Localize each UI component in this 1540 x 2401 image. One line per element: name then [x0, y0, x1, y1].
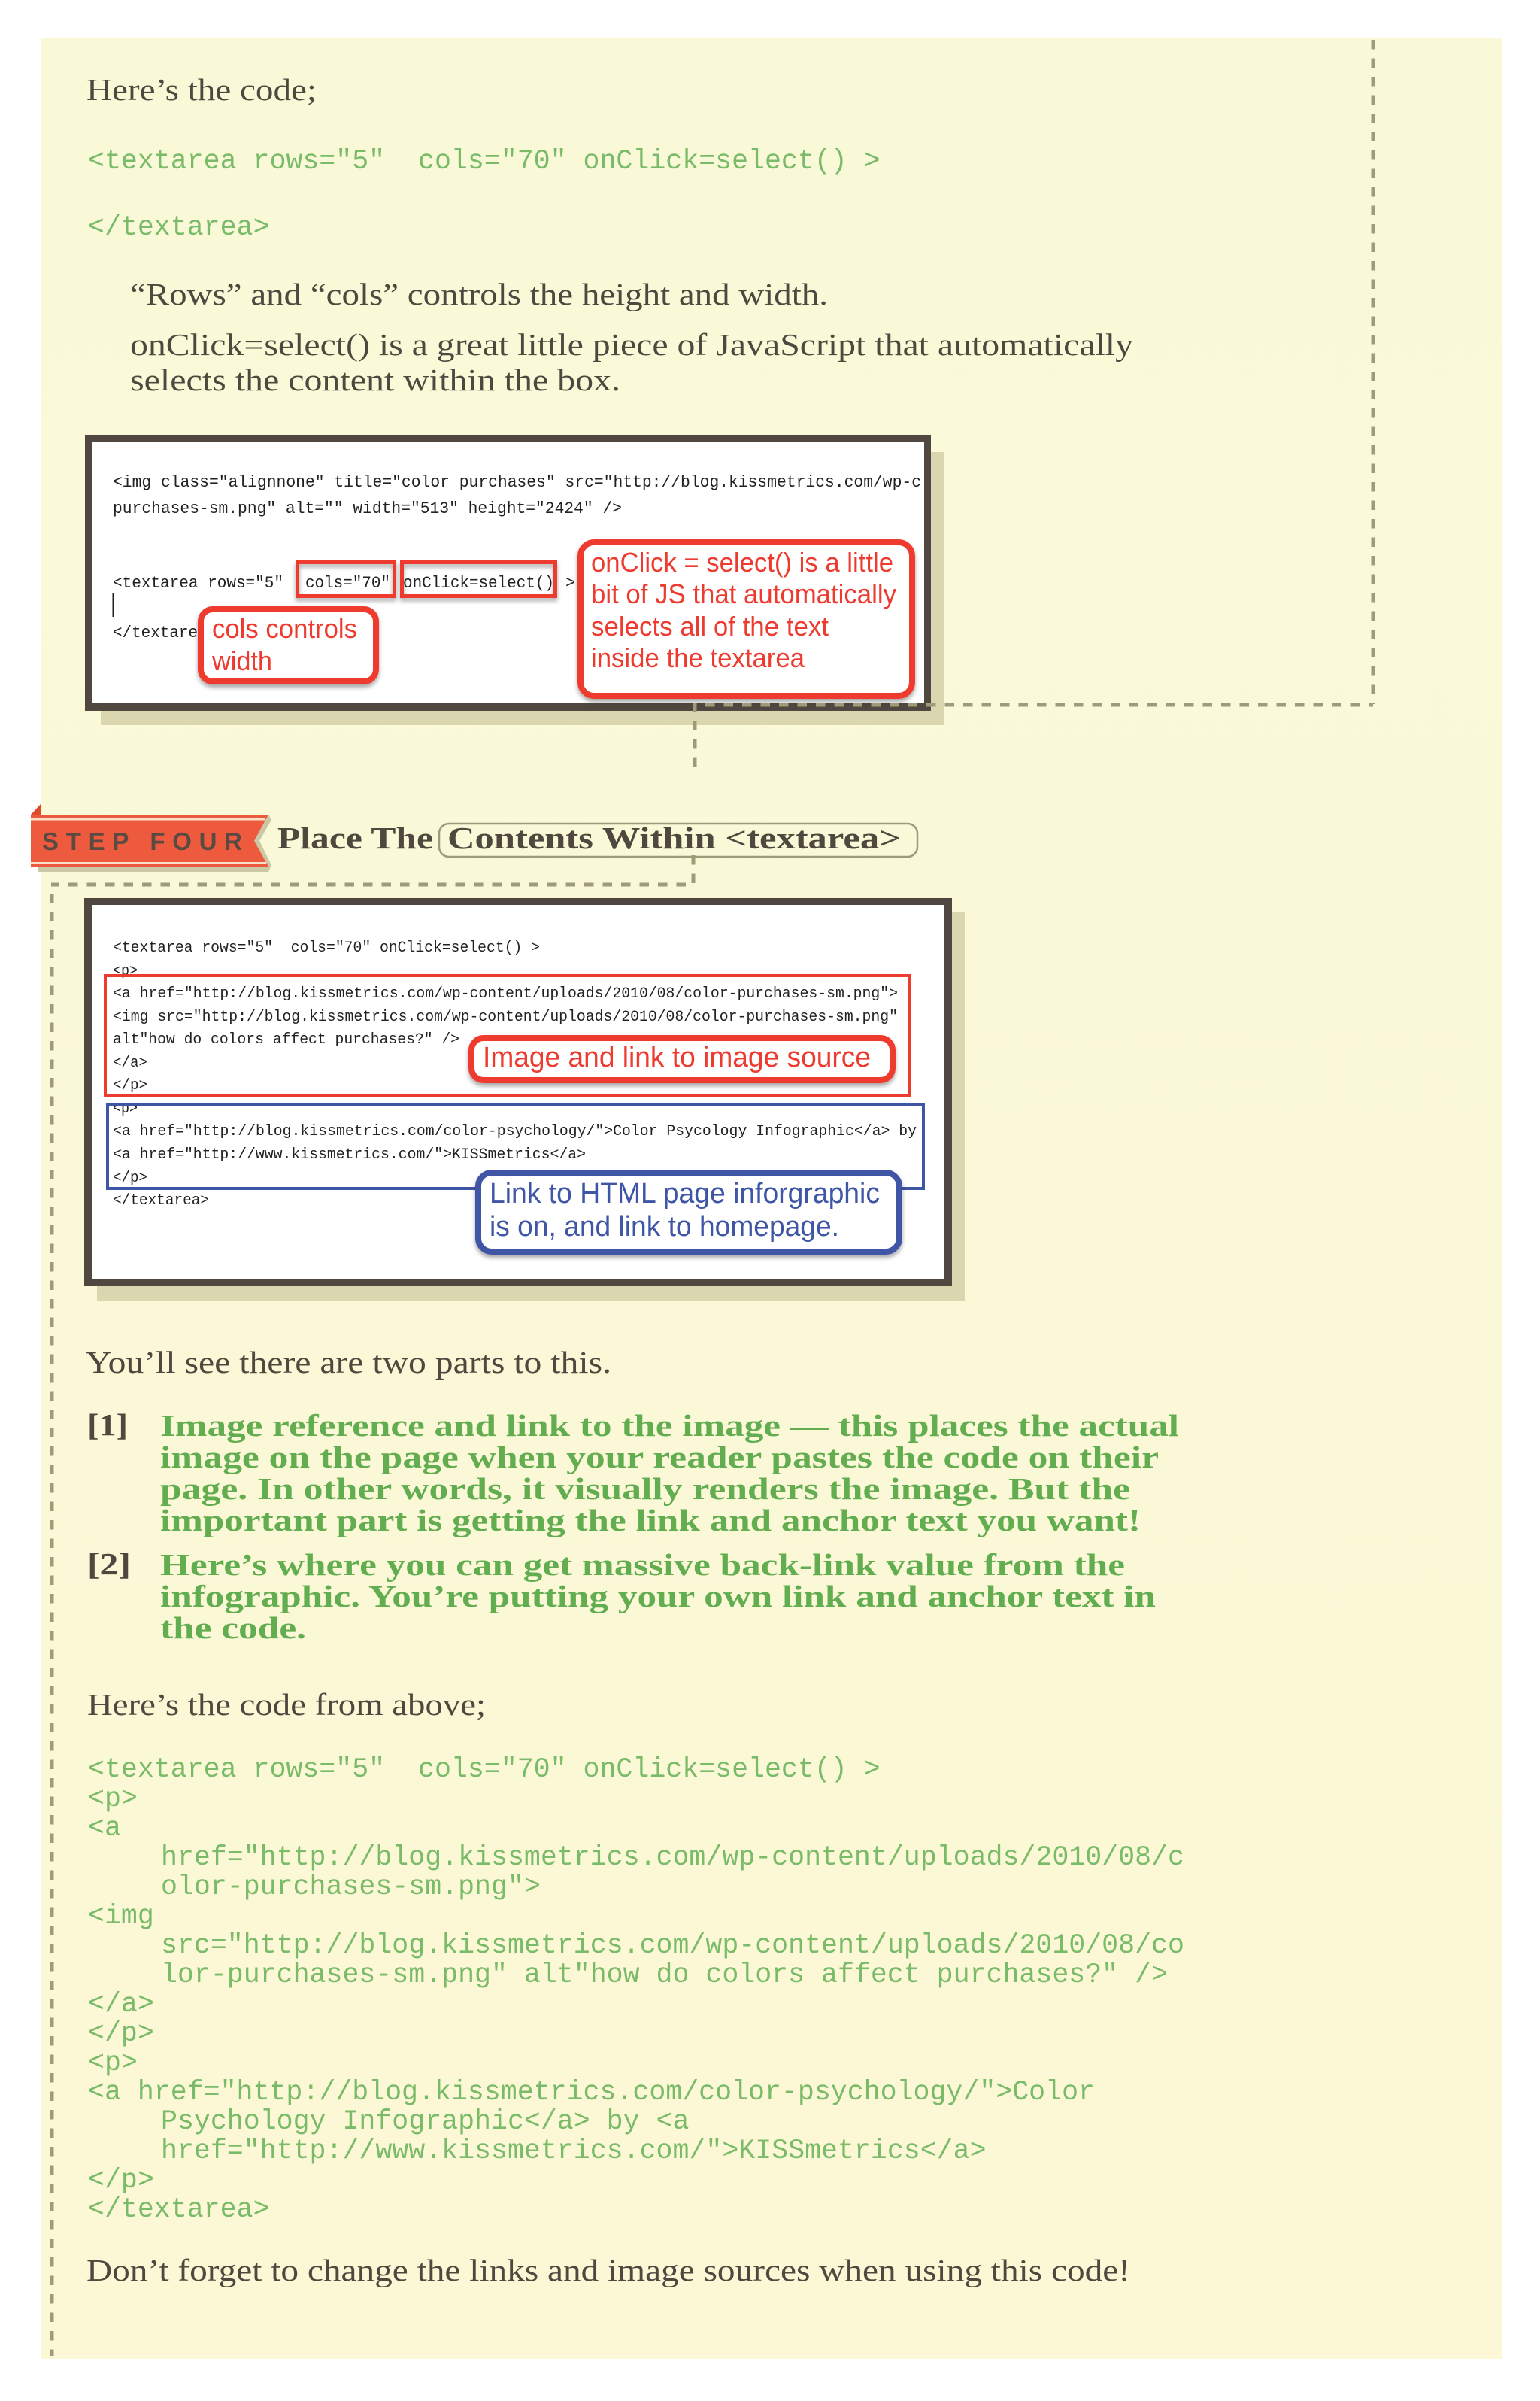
callout: cols controls width: [201, 609, 376, 681]
screenshot: textarea contents: <p>: [113, 1100, 138, 1118]
list item 1: [87, 1407, 1179, 1537]
list item 1: image on the page when your reader pastes the code on their: [160, 1440, 1159, 1474]
code snippet: full textarea: olor-purchases-sm.png">: [161, 1871, 541, 1902]
callout: onClick select: inside the textarea: [591, 642, 805, 673]
screenshot: textarea contents: <a href="http://blog.kissmetrics.com/wp-content/uploads/2010/08/color-purchases-sm.png">: [113, 985, 898, 1003]
callout: link to html page: is on, and link to homepage.: [490, 1211, 839, 1243]
list item 1: page. In other words, it visually renders the image. But the: [160, 1471, 1130, 1506]
list item 1: Image reference and link to the image — this places the actual: [160, 1408, 1179, 1443]
code snippet: full textarea: <textarea rows="5" cols="70" onClick=select() >: [88, 1754, 881, 1785]
code snippet: full textarea: </textarea>: [88, 2194, 269, 2225]
callout: link to html page: Link to HTML page inforgraphic: [490, 1178, 880, 1210]
text block: code from above: Here’s the code from above;: [87, 1687, 486, 1722]
screenshot: textarea contents: <a href="http://www.kissmetrics.com/">KISSmetrics</a>: [113, 1146, 586, 1164]
screenshot: textarea contents: alt"how do colors affect purchases?" />: [113, 1031, 459, 1049]
code snippet: full textarea: <a href="http://blog.kissmetrics.com/color-psychology/">Color: [88, 2077, 1095, 2108]
callout: cols controls width: cols controls: [212, 613, 357, 644]
code snippet: full textarea: <a: [88, 1813, 121, 1844]
screenshot: textarea contents: <p>: [113, 963, 138, 980]
heading: place the contents: Place The: [277, 821, 433, 855]
callout: onClick select: selects all of the text: [591, 611, 829, 642]
heading: place the contents: Contents Within <textarea>: [447, 821, 901, 855]
code snippet: full textarea: href="http://www.kissmetrics.com/">KISSmetrics</a>: [161, 2135, 987, 2166]
code snippet: full textarea: href="http://blog.kissmetrics.com/wp-content/uploads/2010/08/c: [161, 1842, 1184, 1873]
list item 2: [87, 1547, 1156, 1645]
dashed connector: top right path: [695, 40, 1373, 769]
screenshot: textarea attributes: <img class="alignnone" title="color purchases" src="http://blog.kissmetrics.com/wp-c: [113, 473, 921, 492]
code snippet: full textarea: </p>: [88, 2165, 154, 2196]
list item 2: the code.: [160, 1610, 306, 1645]
code snippet: short textarea: [88, 146, 881, 243]
callout: cols controls width: width: [211, 645, 272, 676]
screenshot: textarea attributes: cols="70": [305, 574, 390, 593]
screenshot: textarea attributes: onClick=select(): [403, 574, 554, 593]
callout: link to html page: [478, 1173, 899, 1252]
list item 2: infographic. You’re putting your own link and anchor text in: [160, 1579, 1156, 1613]
callout: onClick select: onClick = select() is a little: [591, 547, 893, 578]
screenshot: textarea attributes: <textarea rows="5": [113, 574, 283, 593]
screenshot: textarea contents: </a>: [113, 1055, 147, 1072]
code snippet: full textarea: <p>: [88, 2047, 138, 2078]
screenshot: textarea contents: <a href="http://blog.kissmetrics.com/color-psychology/">Color Psycology Infographic</a> by: [113, 1123, 917, 1140]
callout: image and link: Image and link to image source: [483, 1042, 871, 1073]
screenshot: textarea contents: [84, 898, 965, 1301]
list item 2: Here’s where you can get massive back-link value from the: [160, 1547, 1125, 1582]
heading: place the contents: [277, 821, 917, 857]
code snippet: full textarea: Psychology Infographic</a> by <a: [161, 2106, 689, 2137]
screenshot: textarea contents: <textarea rows="5" cols="70" onClick=select() >: [113, 939, 540, 957]
screenshot: textarea contents: <img src="http://blog.kissmetrics.com/wp-content/uploads/2010/08/color-purchases-sm.png": [113, 1009, 898, 1026]
code snippet: full textarea: </p>: [88, 2018, 154, 2049]
code snippet: short textarea: </textarea>: [88, 212, 269, 243]
text block: closing reminder: Don’t forget to change the links and image sources when using this code!: [86, 2253, 1130, 2287]
code snippet: full textarea: lor-purchases-sm.png" alt"how do colors affect purchases?" />: [161, 1959, 1168, 1990]
ribbon: step four: STEP FOUR: [42, 827, 242, 855]
screenshot: textarea attributes: </textare: [113, 624, 198, 642]
screenshot: textarea contents: </textarea>: [113, 1192, 209, 1210]
list item 1: [1]: [87, 1407, 128, 1442]
text block: two parts: You’ll see there are two parts to this.: [86, 1345, 611, 1380]
callout: onClick select: bit of JS that automatically: [591, 578, 896, 609]
text block: rows and cols explanation: selects the content within the box.: [130, 363, 620, 397]
list item 2: [2]: [87, 1547, 131, 1581]
callout: onClick select: [581, 542, 912, 696]
screenshot: textarea contents: </p>: [113, 1170, 147, 1187]
list item 1: important part is getting the link and anchor text you want!: [160, 1503, 1141, 1537]
screenshot: textarea attributes: >: [565, 574, 575, 593]
text block: intro: Here’s the code;: [86, 72, 317, 107]
screenshot: textarea contents: </p>: [113, 1077, 147, 1094]
screenshot: textarea attributes: purchases-sm.png" alt="" width="513" height="2424" />: [113, 499, 622, 518]
screenshot: textarea attributes: [85, 435, 944, 725]
text block: rows and cols explanation: “Rows” and “cols” controls the height and width.: [130, 277, 828, 311]
text block: rows and cols explanation: onClick=select() is a great little piece of JavaScript that automatically: [130, 327, 1134, 362]
code snippet: full textarea: <img: [88, 1901, 154, 1932]
code snippet: full textarea: [88, 1754, 1184, 2225]
code snippet: full textarea: <p>: [88, 1783, 138, 1814]
ribbon: step four: [31, 804, 271, 872]
dashed connector: heading to left rail: [51, 855, 693, 2356]
code snippet: short textarea: <textarea rows="5" cols="70" onClick=select() >: [88, 146, 881, 177]
code snippet: full textarea: </a>: [88, 1989, 154, 2020]
code snippet: full textarea: src="http://blog.kissmetrics.com/wp-content/uploads/2010/08/co: [161, 1930, 1184, 1961]
text block: rows and cols explanation: [130, 277, 1134, 397]
